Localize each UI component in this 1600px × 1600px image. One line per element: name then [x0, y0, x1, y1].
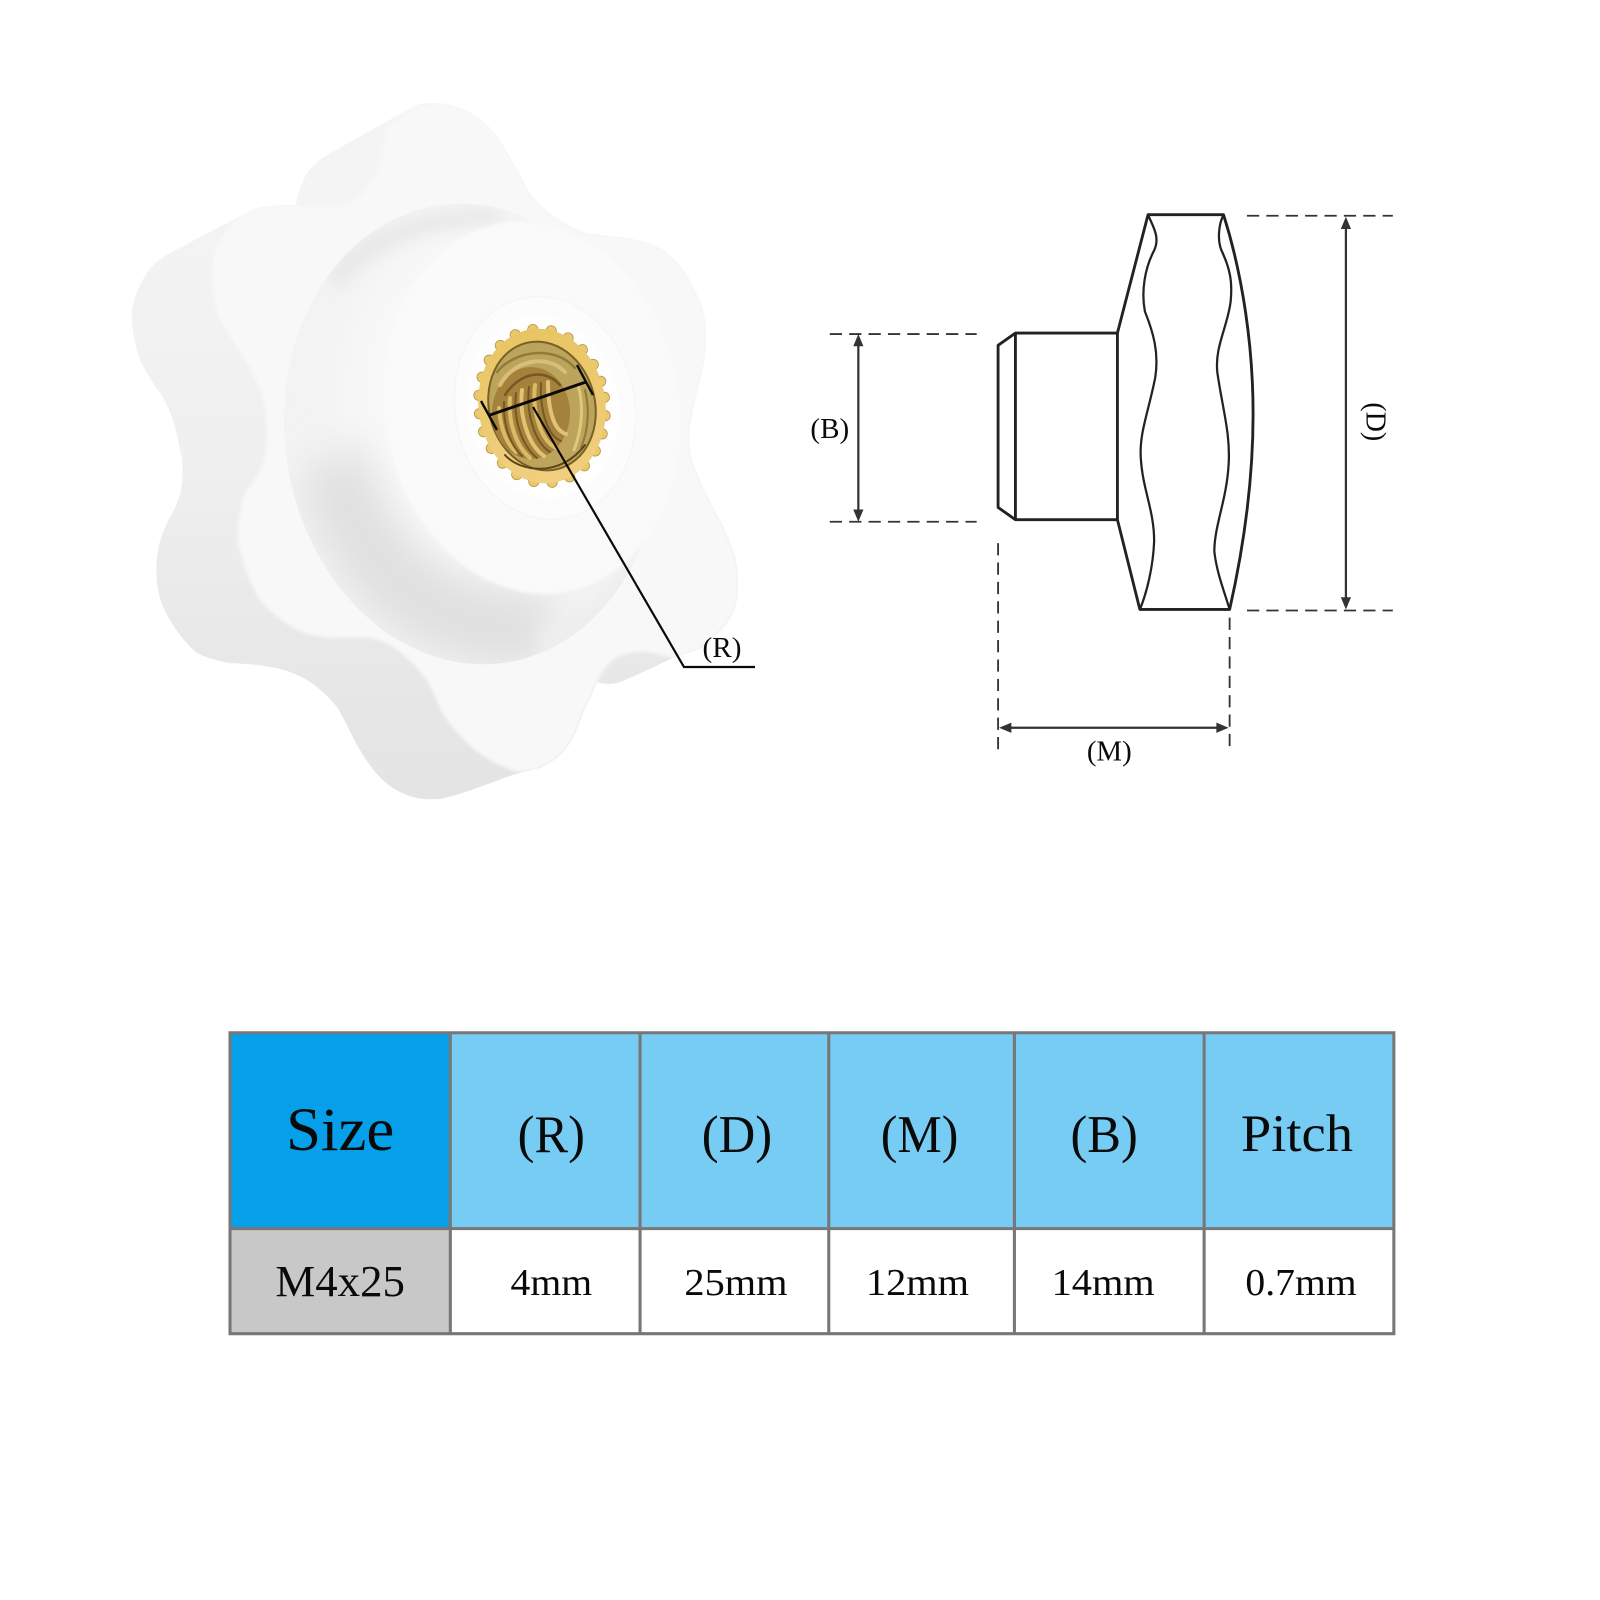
header row text: (R): [518, 1106, 585, 1164]
brass insert: [468, 320, 616, 492]
left wavy edge: [1140, 215, 1157, 609]
label R: (R): [702, 632, 741, 664]
data row text: 12mm: [866, 1262, 969, 1304]
dimension D: (D): [1359, 402, 1390, 441]
data row text: [275, 1256, 1357, 1306]
dimension M: (M): [1087, 736, 1132, 767]
knob front face: [238, 451, 738, 772]
data row text: 0.7mm: [1245, 1262, 1357, 1304]
dimension D: [1247, 216, 1393, 610]
data row text: 14mm: [1052, 1262, 1155, 1304]
photo: white star knob with brass insert: [132, 103, 755, 799]
header row text: [286, 1096, 1353, 1164]
knob outline drawing: [998, 215, 1253, 609]
technical side-view drawing: [810, 215, 1393, 767]
threads: [492, 353, 588, 469]
recess shading: [305, 228, 552, 664]
ring around insert: [437, 282, 653, 534]
header row text: (M): [881, 1106, 958, 1164]
data row text: M4x25: [275, 1256, 405, 1306]
header fills: [230, 1033, 1394, 1334]
header row text: Size: [286, 1096, 394, 1164]
dimension B: (B): [810, 414, 849, 445]
header row text: Pitch: [1241, 1105, 1353, 1163]
shank: [998, 333, 1117, 520]
knurled rim: [469, 321, 615, 491]
right wavy edge: [1214, 215, 1231, 609]
header row text: (B): [1071, 1106, 1138, 1164]
dimension M: [998, 543, 1230, 767]
leader and dimension R: [481, 365, 755, 667]
data row text: 4mm: [511, 1262, 592, 1304]
hub front face: [355, 198, 709, 618]
table grid: [230, 1033, 1394, 1334]
specification table: [230, 1033, 1394, 1334]
header row text: (D): [702, 1106, 772, 1164]
data row text: 25mm: [684, 1262, 787, 1304]
knob side walls: [132, 103, 738, 799]
hub recess: [255, 179, 689, 689]
bore: [475, 330, 609, 482]
head: [1117, 215, 1253, 609]
dimension B: [810, 334, 977, 522]
